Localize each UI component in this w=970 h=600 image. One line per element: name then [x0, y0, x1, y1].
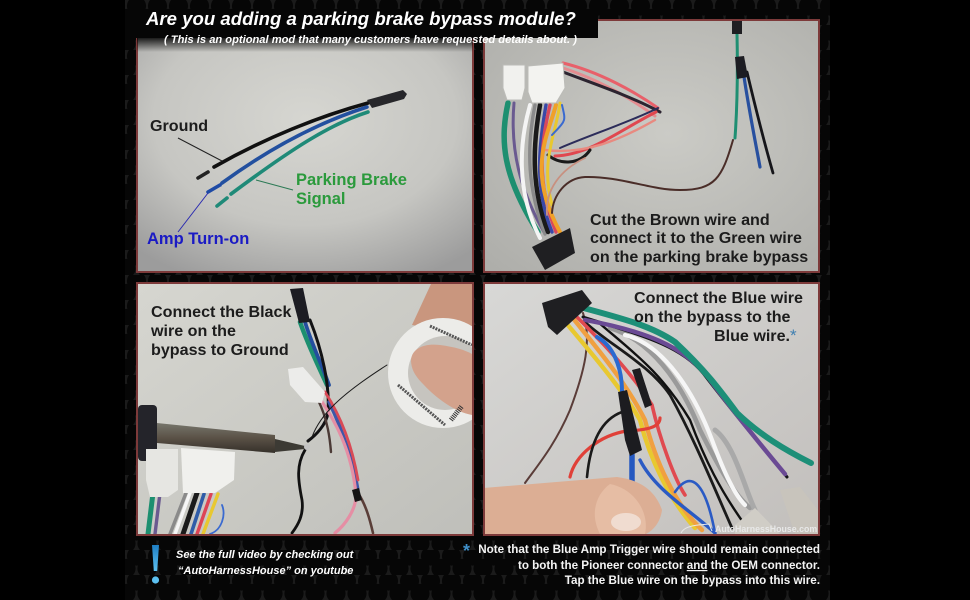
- icon: fingers holding wire: [483, 477, 662, 536]
- text: cut the brown wire: Cut the Brown wire and: [590, 211, 770, 229]
- text: cut the brown wire: on the parking brake bypass: [590, 248, 808, 266]
- panel: black wire to ground: [137, 283, 498, 535]
- label: Parking Brake Signal: Parking Brake: [296, 171, 407, 189]
- panel: cut the brown wire: [484, 20, 819, 272]
- icon: blue exclamation mark: [152, 545, 159, 584]
- text: connect the black wire: Connect the Black: [151, 303, 291, 321]
- icon: soldering iron: [138, 405, 310, 461]
- icon: connectors with wires: [146, 448, 235, 534]
- text: cut the brown wire: [590, 211, 808, 266]
- panel: bypass module wires: [137, 37, 473, 272]
- icon: bypass module with brown splice: [732, 20, 773, 173]
- label: Parking Brake Signal: [256, 171, 407, 208]
- text: connect the blue wire: Connect the Blue wire: [634, 289, 803, 307]
- text: connect the blue wire: [634, 292, 802, 341]
- text: blue wire note: Note that the Blue Amp Trigger wire should remain connected: [478, 543, 820, 556]
- subtitle: ( This is an optional mod that many customers have requested details about. ): [164, 34, 577, 46]
- text: video note: [176, 549, 355, 577]
- label: Parking Brake Signal: Signal: [296, 190, 346, 208]
- text: cut the brown wire: connect it to the Green wire: [590, 229, 802, 247]
- icon: bypass and soldered wires: [288, 288, 387, 533]
- icon: bypass module with three wires: [198, 90, 407, 206]
- label: Amp Turn-on: [147, 193, 249, 248]
- text: blue wire note: to both the Pioneer connector and the OEM connector.: [518, 559, 820, 572]
- icon: solder spool and hand: [388, 284, 472, 428]
- text: blue wire note: *: [463, 541, 470, 561]
- text: blue wire note: Tap the Blue wire on the bypass into this wire.: [565, 574, 820, 587]
- label: Ground: Ground: [150, 117, 208, 135]
- text: connect the black wire: wire on the: [150, 322, 236, 340]
- text: connect the blue wire: *: [790, 326, 797, 345]
- title banner: [125, 8, 598, 52]
- icon: wiring harness close-up: [525, 290, 818, 534]
- logo: AutoHarnessHouse.com: AutoHarnessHouse.com: [715, 524, 817, 534]
- text: connect the black wire: bypass to Ground: [151, 341, 289, 359]
- icon: wiring harness with connectors: [503, 63, 733, 270]
- label: Amp Turn-on: Amp Turn-on: [147, 230, 249, 248]
- text: connect the black wire: [150, 303, 291, 359]
- text: blue wire note: [463, 541, 820, 587]
- panel: blue wire tap: [483, 283, 819, 536]
- text: video note: See the full video by checking out: [176, 549, 355, 561]
- text: connect the blue wire: on the bypass to the: [634, 308, 791, 326]
- text: connect the blue wire: Blue wire.: [714, 327, 790, 345]
- text: video note: “AutoHarnessHouse” on youtube: [178, 565, 353, 577]
- label: Ground: [150, 117, 222, 161]
- title: Are you adding a parking brake bypass module?: [145, 8, 576, 29]
